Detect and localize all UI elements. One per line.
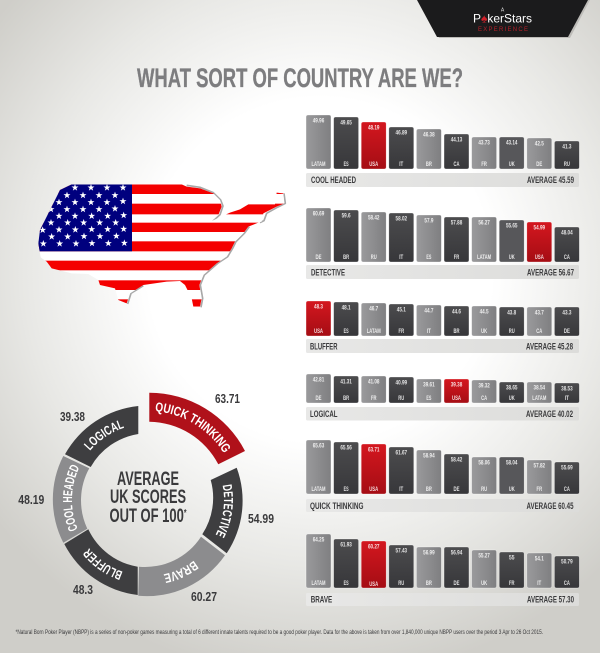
bar: LATAM: LATAM bbox=[312, 162, 326, 168]
bar: USA bbox=[361, 541, 386, 588]
caption band bbox=[306, 593, 579, 606]
bar: ES: 48.1 bbox=[342, 306, 351, 312]
bar: UK: UK bbox=[509, 255, 515, 261]
bar: RU bbox=[499, 307, 524, 336]
bar: DE: DE bbox=[454, 487, 460, 493]
segment: quick thinking: QUICK THINKING bbox=[156, 402, 230, 452]
bar: BR bbox=[334, 210, 359, 262]
bar: CA: CA bbox=[536, 329, 543, 335]
bar: LATAM bbox=[306, 534, 331, 588]
caption band: BLUFFER bbox=[310, 341, 338, 351]
bar: FR bbox=[389, 304, 414, 336]
bar: USA: USA bbox=[535, 255, 544, 261]
bar: LATAM: LATAM bbox=[477, 255, 491, 261]
bar: RU: 57.43 bbox=[396, 548, 408, 554]
bar: BR: BR bbox=[426, 487, 432, 493]
bar: USA: USA bbox=[314, 329, 323, 335]
donut values: 63.71 bbox=[215, 391, 240, 406]
bar: CA: CA bbox=[564, 487, 570, 493]
segment: quick thinking bbox=[149, 392, 245, 464]
donut centre text: OUT OF 100 bbox=[110, 506, 218, 527]
bar: FR: FR bbox=[371, 396, 377, 402]
icon: USA map with flag bbox=[33, 180, 293, 310]
bar: BR: BR bbox=[454, 329, 460, 335]
donut values: 54.99 bbox=[248, 511, 274, 526]
bar: CA: 50.79 bbox=[561, 560, 573, 566]
bar: IT: 38.53 bbox=[561, 386, 573, 392]
bar: IT: IT bbox=[427, 329, 431, 335]
bar: ES: 49.65 bbox=[340, 120, 352, 126]
bar: BR: 41.31 bbox=[340, 380, 352, 386]
donut values: 60.27 bbox=[191, 589, 217, 604]
bar: UK: UK bbox=[481, 581, 488, 587]
bar: BR: 46.38 bbox=[423, 132, 435, 138]
bar: IT: 61.67 bbox=[396, 450, 408, 456]
bar: ES: ES bbox=[426, 396, 431, 402]
bar: LATAM: 56.27 bbox=[478, 220, 490, 226]
segment: cool headed bbox=[52, 456, 90, 543]
logo: PokerStars Experience bbox=[417, 0, 590, 38]
bar: IT bbox=[527, 553, 552, 588]
segment: cool headed: COOL HEADED bbox=[63, 464, 78, 532]
bar: LATAM bbox=[361, 303, 386, 336]
bar: UK: 38.65 bbox=[506, 386, 518, 392]
bar: BR: 44.6 bbox=[452, 310, 462, 316]
bar: RU: RU bbox=[509, 329, 515, 335]
bar: BR bbox=[416, 450, 441, 494]
bar: UK: UK bbox=[509, 487, 515, 493]
bar: BR bbox=[416, 129, 441, 169]
caption band bbox=[306, 265, 579, 279]
caption band: AVERAGE 40.02 bbox=[526, 409, 573, 419]
bar: FR bbox=[361, 376, 386, 403]
bar: FR: FR bbox=[509, 581, 515, 587]
bar: DE bbox=[554, 307, 579, 336]
segment: detective: DETECTIVE bbox=[216, 484, 233, 538]
bar: LATAM: 65.63 bbox=[313, 444, 325, 450]
bar: LATAM: 38.54 bbox=[534, 386, 546, 392]
bar: DE: 60.69 bbox=[313, 212, 325, 218]
logo: PokerStars Experience: EXPERIENCE bbox=[478, 27, 528, 33]
bar: FR bbox=[472, 137, 497, 169]
bar: FR: 41.08 bbox=[368, 380, 380, 386]
bar: CA bbox=[527, 307, 552, 336]
bar: FR: FR bbox=[481, 162, 487, 168]
bar: DE bbox=[306, 208, 331, 262]
bar: USA: 54.99 bbox=[534, 226, 546, 232]
bar: LATAM bbox=[306, 440, 331, 494]
bar: CA: 55.69 bbox=[561, 466, 573, 472]
bar: UK bbox=[472, 306, 497, 336]
bar: DE: 43.3 bbox=[562, 310, 572, 316]
bar: RU: 41.3 bbox=[562, 144, 572, 150]
bar: DE bbox=[444, 547, 469, 588]
bar: CA bbox=[444, 134, 469, 169]
bar: FR: FR bbox=[454, 255, 460, 261]
bar: CA: 44.13 bbox=[451, 138, 463, 144]
caption band: BRAVE bbox=[311, 594, 332, 604]
bar: CA bbox=[472, 380, 497, 403]
bar: USA: USA bbox=[369, 487, 379, 493]
bar: USA: USA bbox=[369, 162, 379, 168]
bar chart: cool headed bbox=[306, 115, 579, 187]
segment: logical bbox=[65, 406, 138, 467]
caption band: LOGICAL bbox=[310, 409, 338, 419]
bar: RU: 43.8 bbox=[507, 310, 517, 316]
bar: ES: ES bbox=[426, 255, 431, 261]
donut values bbox=[18, 391, 274, 604]
bar: LATAM: 46.7 bbox=[369, 306, 379, 312]
bar: IT bbox=[389, 447, 414, 494]
bar: LATAM: LATAM bbox=[367, 329, 381, 335]
bar: UK: 55.65 bbox=[506, 224, 518, 230]
bar: FR bbox=[444, 217, 469, 262]
bar: CA: CA bbox=[454, 162, 460, 168]
bar: USA: 39.38 bbox=[451, 382, 463, 388]
bar: RU: RU bbox=[398, 581, 404, 587]
bar: LATAM bbox=[472, 217, 497, 262]
bar: BR: 58.94 bbox=[423, 454, 435, 460]
bar: IT bbox=[389, 127, 414, 169]
bar: BR: 59.6 bbox=[342, 214, 351, 220]
bar: RU: 58.06 bbox=[478, 460, 490, 466]
bar: FR: 45.1 bbox=[397, 308, 406, 314]
bar: IT: IT bbox=[537, 581, 542, 587]
bar: CA: CA bbox=[564, 581, 570, 587]
bar: LATAM: LATAM bbox=[312, 581, 326, 587]
bar chart: brave bbox=[306, 534, 579, 606]
donut centre text: UK SCORES bbox=[110, 487, 186, 508]
title: WHAT SORT OF COUNTRY ARE WE? bbox=[137, 63, 463, 93]
bar: BR: 56.99 bbox=[423, 550, 435, 556]
bar: ES: 39.61 bbox=[423, 382, 435, 388]
bar: BR: BR bbox=[426, 162, 432, 168]
caption band bbox=[306, 499, 579, 512]
bar: RU: 40.99 bbox=[396, 380, 408, 386]
bar: ES bbox=[334, 442, 359, 494]
bar: FR: 57.88 bbox=[451, 220, 463, 226]
bar: BR bbox=[334, 376, 359, 403]
bar: BR: BR bbox=[343, 255, 350, 261]
bar: ES: 57.9 bbox=[424, 218, 434, 224]
bar: RU: RU bbox=[564, 162, 570, 168]
bar: LATAM bbox=[527, 382, 552, 403]
bar: USA: 48.3 bbox=[314, 304, 324, 310]
bar: FR: FR bbox=[399, 329, 405, 335]
bar: ES: 61.93 bbox=[340, 542, 352, 548]
bar: RU bbox=[389, 377, 414, 403]
bar chart: detective bbox=[306, 208, 579, 279]
bar: FR: FR bbox=[537, 487, 543, 493]
bar: UK bbox=[472, 550, 497, 588]
bar: CA bbox=[554, 462, 579, 494]
bar: UK bbox=[499, 382, 524, 403]
bar: IT: 46.89 bbox=[396, 130, 408, 136]
donut centre text: AVERAGE bbox=[117, 469, 179, 490]
bar: FR: 55 bbox=[509, 556, 515, 562]
bar: RU: RU bbox=[398, 396, 404, 402]
bar: UK: UK bbox=[509, 396, 515, 402]
bar: RU bbox=[472, 457, 497, 494]
caption band bbox=[306, 339, 579, 353]
bar: RU bbox=[554, 141, 579, 169]
bar: IT: IT bbox=[399, 162, 404, 168]
bar: UK bbox=[499, 137, 524, 169]
bar: USA bbox=[361, 122, 386, 169]
bar: DE bbox=[527, 138, 552, 169]
logo: PokerStars Experience: A bbox=[501, 8, 505, 14]
segment: detective bbox=[202, 468, 243, 554]
bar: DE: DE bbox=[316, 396, 322, 402]
bar: RU bbox=[389, 545, 414, 588]
bar: USA: USA bbox=[369, 582, 379, 588]
bar: DE: 58.42 bbox=[451, 458, 463, 464]
donut centre text bbox=[110, 469, 187, 527]
bar: IT: IT bbox=[399, 255, 404, 261]
bar: ES bbox=[334, 539, 359, 588]
caption band bbox=[306, 407, 579, 420]
donut values: 48.19 bbox=[18, 492, 44, 507]
caption band: QUICK THINKING bbox=[310, 501, 364, 511]
donut centre text: * bbox=[184, 508, 187, 519]
bar: ES: 65.56 bbox=[340, 446, 352, 452]
segment: brave bbox=[138, 536, 225, 596]
bar: UK: 55.27 bbox=[478, 554, 490, 560]
bar: UK: 43.14 bbox=[506, 140, 518, 146]
bar: CA bbox=[554, 556, 579, 588]
bar: BR: BR bbox=[426, 581, 432, 587]
bar chart: logical bbox=[306, 374, 579, 420]
caption band: DETECTIVE bbox=[311, 267, 345, 277]
bar: IT bbox=[389, 213, 414, 262]
caption band bbox=[306, 173, 579, 187]
bar: DE bbox=[306, 374, 331, 403]
bar: CA: 48.04 bbox=[561, 230, 573, 236]
bar: DE: 56.94 bbox=[451, 550, 463, 556]
bar: RU: 58.42 bbox=[368, 216, 380, 222]
bar: USA bbox=[361, 444, 386, 494]
bar: IT: 44.7 bbox=[424, 308, 434, 314]
bar: LATAM: 49.96 bbox=[313, 118, 325, 124]
bar: DE: 42.81 bbox=[313, 378, 325, 384]
bar: IT: IT bbox=[565, 396, 569, 402]
bar: CA: CA bbox=[481, 396, 488, 402]
bar: DE bbox=[444, 454, 469, 494]
bar: DE: DE bbox=[536, 162, 542, 168]
bar chart: quick thinking bbox=[306, 440, 579, 512]
bar: USA: USA bbox=[452, 396, 461, 402]
segment: bluffer bbox=[64, 529, 138, 595]
bar: CA: CA bbox=[564, 255, 570, 261]
bar: UK: UK bbox=[481, 329, 488, 335]
bar chart: bluffer bbox=[306, 301, 579, 353]
bar: DE: DE bbox=[316, 255, 322, 261]
bar: CA: 43.7 bbox=[535, 310, 544, 316]
bar: ES bbox=[416, 215, 441, 262]
bar: DE: DE bbox=[454, 581, 460, 587]
segment: brave: BRAVE bbox=[164, 560, 199, 583]
bar: IT: 58.02 bbox=[396, 216, 408, 222]
bar: USA bbox=[444, 379, 469, 403]
bar: FR bbox=[527, 460, 552, 494]
bar: USA bbox=[527, 222, 552, 262]
bar: IT: 54.1 bbox=[535, 556, 544, 562]
bar: ES: ES bbox=[344, 581, 349, 587]
bar: ES: ES bbox=[344, 162, 349, 168]
bar: UK: 44.5 bbox=[480, 310, 489, 316]
logo: PokerStars Experience: P♠kerStars bbox=[473, 12, 532, 26]
caption band: COOL HEADED bbox=[311, 175, 356, 185]
bar: ES bbox=[334, 302, 359, 336]
bar: BR: BR bbox=[343, 396, 350, 402]
bar: FR bbox=[499, 552, 524, 588]
bar: USA: 60.27 bbox=[368, 544, 380, 550]
bar: UK bbox=[499, 457, 524, 494]
bar: USA bbox=[306, 301, 331, 336]
bar: CA bbox=[554, 227, 579, 262]
caption band: AVERAGE 45.59 bbox=[527, 175, 574, 185]
bar: FR: 43.73 bbox=[478, 140, 490, 146]
bar: RU: RU bbox=[371, 255, 377, 261]
bar: IT bbox=[416, 305, 441, 336]
donut chart: average UK scores bbox=[18, 391, 274, 604]
bar: BR bbox=[416, 547, 441, 588]
bar: LATAM bbox=[306, 115, 331, 169]
donut values: 48.3 bbox=[73, 582, 93, 597]
bar: ES bbox=[416, 379, 441, 403]
bar: USA: 48.19 bbox=[368, 126, 380, 132]
bar: DE: DE bbox=[564, 329, 570, 335]
bar: CA: 39.32 bbox=[478, 384, 490, 390]
bar: LATAM: LATAM bbox=[312, 487, 326, 493]
bar: ES: ES bbox=[344, 329, 349, 335]
donut values: 39.38 bbox=[60, 409, 85, 424]
bar: DE: 42.5 bbox=[535, 142, 544, 148]
caption band: AVERAGE 60.45 bbox=[526, 501, 574, 511]
segment: logical: LOGICAL bbox=[84, 420, 124, 450]
bar: UK: 58.04 bbox=[506, 460, 518, 466]
bar: IT: IT bbox=[399, 487, 404, 493]
bar: UK bbox=[499, 220, 524, 262]
bar: FR: 57.82 bbox=[534, 464, 546, 470]
bar: RU bbox=[361, 212, 386, 262]
bar: USA: 63.71 bbox=[368, 448, 380, 454]
caption band: AVERAGE 57.30 bbox=[527, 594, 574, 604]
bar: LATAM: LATAM bbox=[532, 396, 546, 402]
caption band: AVERAGE 56.67 bbox=[527, 267, 574, 277]
bar: RU: RU bbox=[481, 487, 487, 493]
bar: ES bbox=[334, 117, 359, 169]
bar: IT bbox=[554, 383, 579, 403]
bar: UK: UK bbox=[509, 162, 515, 168]
segment: bluffer: BLUFFER bbox=[84, 548, 122, 580]
bar: LATAM: 64.25 bbox=[313, 538, 325, 544]
bar: ES: ES bbox=[344, 487, 349, 493]
bar: BR bbox=[444, 306, 469, 336]
caption band: AVERAGE 45.28 bbox=[526, 341, 573, 351]
